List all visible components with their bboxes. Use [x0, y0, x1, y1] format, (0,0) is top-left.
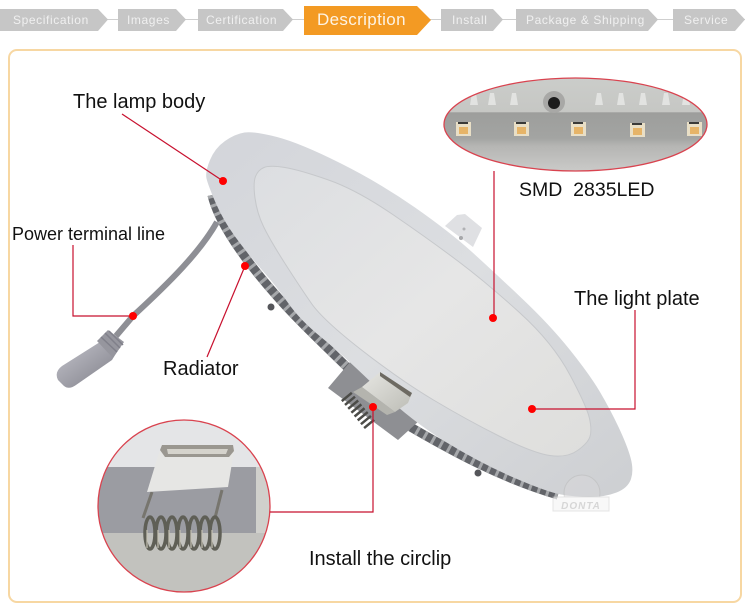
tab: Package & Shipping: Package & Shipping [526, 13, 645, 27]
mounting tab [445, 214, 482, 247]
leader: SMD LED [489, 171, 497, 322]
leader: radiator [207, 262, 249, 357]
spring coils [145, 517, 220, 549]
tab: Images [118, 9, 186, 31]
DC plug [57, 330, 124, 388]
circlip on lamp [346, 372, 412, 425]
label: The light plate: The light plate [574, 288, 700, 310]
radiator fins [212, 195, 558, 495]
inset: SMD LED close-up [444, 78, 708, 172]
circlip mounting plate [328, 362, 420, 440]
tab: Images: Images [127, 13, 170, 27]
navigation bar [0, 6, 745, 35]
watermark [553, 475, 609, 512]
lamp body rim [206, 132, 632, 497]
label: SMD 2835LED: SMD 2835LED [519, 179, 654, 201]
white clip [147, 467, 232, 492]
tab: Specification [0, 9, 108, 31]
lamp illustration [57, 132, 632, 512]
tab: Certification [198, 9, 293, 31]
power cable [116, 222, 217, 336]
leader: circlip [270, 403, 377, 512]
leader: lamp body [122, 114, 227, 185]
tab: Package & Shipping [516, 9, 658, 31]
LED chips [456, 122, 702, 137]
tab: Service: Service [684, 13, 728, 27]
tab: Certification: Certification [206, 13, 277, 27]
tab: Description: Description [317, 10, 406, 29]
label: Install the circlip: Install the circlip [309, 548, 451, 570]
heat sink fins [470, 93, 690, 105]
label: Power terminal line: Power terminal line [12, 224, 165, 244]
tab: Specification: Specification [13, 13, 89, 27]
watermark: DONTA [561, 501, 601, 512]
leader: power terminal line [73, 245, 137, 320]
label: The lamp body: The lamp body [73, 91, 205, 113]
tab: Install [441, 9, 503, 31]
leader: light plate [528, 310, 635, 413]
light plate [254, 166, 591, 456]
tab: Description [304, 6, 431, 35]
inset: circlip close-up [98, 420, 270, 592]
tab: Service [673, 9, 745, 31]
label: Radiator: Radiator [163, 358, 239, 380]
tab: Install: Install [452, 13, 488, 27]
